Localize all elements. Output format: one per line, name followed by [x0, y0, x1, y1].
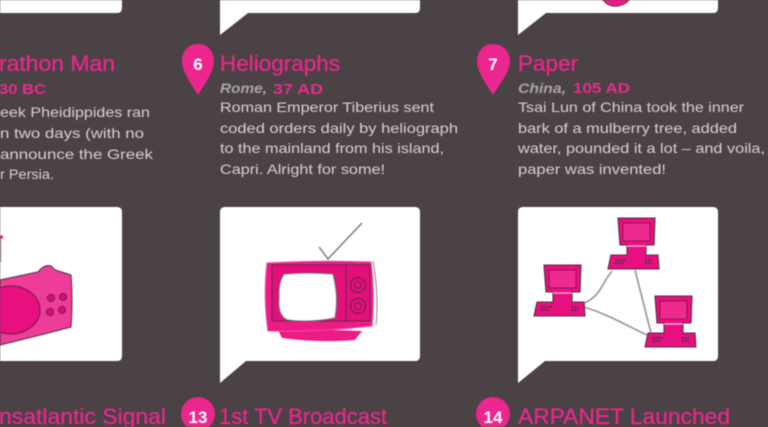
icon: map pin 14	[476, 397, 510, 427]
description: Tsai Lun of China took the inner	[518, 99, 744, 115]
entry 14: ARPANET Launched	[476, 397, 730, 427]
top-middle speech bubble with tail (row 1, cropped)	[220, 0, 420, 35]
place and date: China,	[518, 80, 566, 96]
place and date	[220, 80, 323, 98]
place and date: 37 AD	[273, 81, 323, 98]
diagram: network of three computers	[534, 218, 696, 347]
description: Roman Emperor Tiberius sent	[220, 99, 434, 115]
description	[220, 99, 458, 177]
place and date	[518, 80, 630, 97]
description: bark of a mulberry tree, added	[518, 120, 737, 136]
description	[517, 99, 765, 177]
icon: cropped pink illustration	[601, 0, 631, 6]
place and date: 105 AD	[573, 80, 630, 97]
icon: map pin 14: 14	[484, 408, 503, 427]
heading: rathon Man	[0, 51, 115, 76]
description: Capri. Alright for some!	[220, 161, 385, 177]
panel: television speech bubble	[220, 207, 420, 383]
description	[0, 104, 154, 182]
panel: ARPANET speech bubble	[518, 207, 718, 383]
date: 30 BC	[0, 81, 46, 98]
place and date: Rome,	[220, 80, 267, 96]
icon: map pin 13	[181, 397, 215, 427]
entry 5: Marathon Man	[0, 51, 154, 182]
icon: map pin 6: 6	[193, 55, 203, 74]
icon: television	[265, 223, 377, 341]
description: to the mainland from his island,	[220, 140, 444, 156]
heading: Paper	[518, 51, 578, 76]
top-right speech bubble with tail (row 1, cropped)	[518, 0, 718, 35]
description: n two days (with no	[0, 125, 144, 141]
icon: radio	[0, 236, 72, 345]
description: eek Pheidippides ran	[0, 104, 150, 120]
heading: Heliographs	[220, 51, 340, 76]
entry 6: Heliographs	[182, 44, 458, 177]
description: paper was invented!	[518, 161, 666, 177]
entry 7: Paper	[477, 44, 765, 177]
description: coded orders daily by heliograph	[220, 120, 458, 136]
top-left speech bubble (row 1, cropped)	[0, 0, 122, 13]
icon: map pin 7: 7	[488, 55, 498, 74]
icon: map pin 6	[182, 44, 214, 95]
icon: map pin 13: 13	[189, 408, 207, 427]
icon: map pin 7	[477, 44, 510, 95]
description: water, pounded it a lot – and voila,	[517, 140, 765, 156]
description: announce the Greek	[0, 146, 154, 162]
panel: radio speech bubble	[0, 207, 122, 361]
description: r Persia.	[0, 166, 54, 182]
entry 13: 1st TV Broadcast	[181, 397, 387, 427]
